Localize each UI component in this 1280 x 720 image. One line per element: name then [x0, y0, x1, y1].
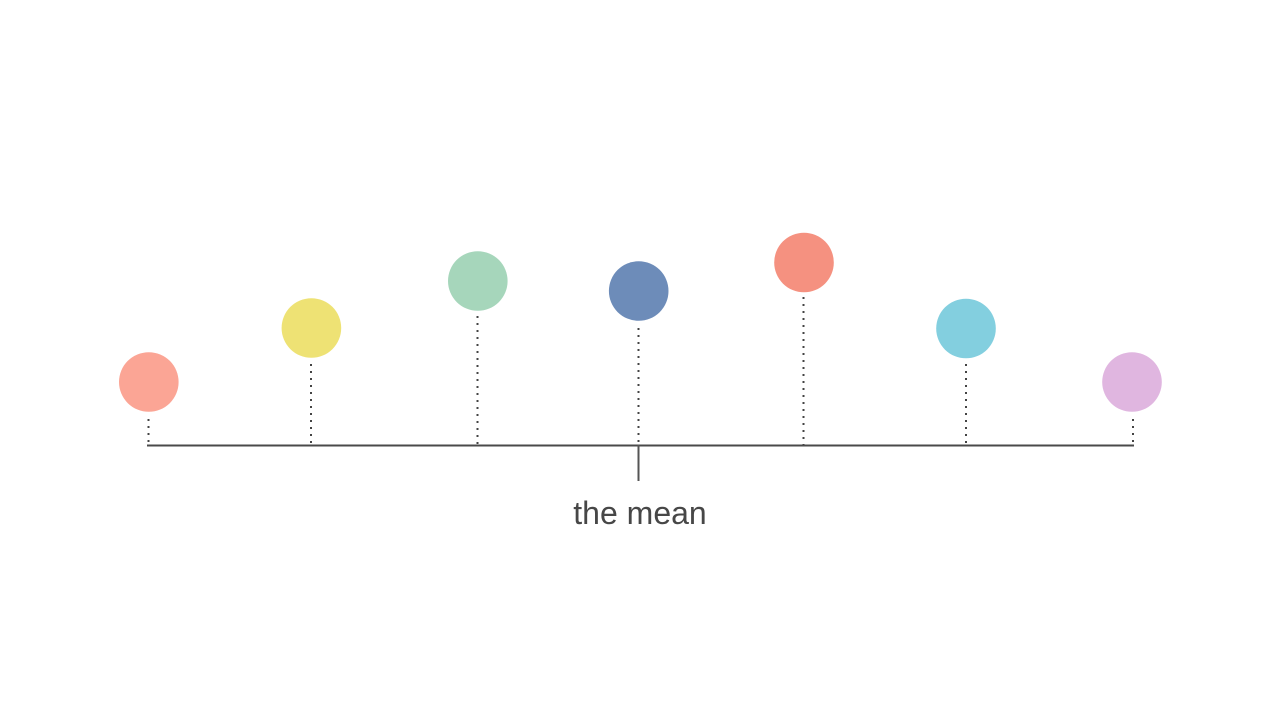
dotted stems — [148, 297, 1133, 445]
point: green circle — [448, 251, 508, 311]
point: light blue circle — [936, 299, 996, 358]
point: yellow circle — [282, 298, 341, 358]
point: blue circle — [609, 261, 668, 321]
number line axis — [147, 444, 1134, 446]
label: the mean: the mean — [573, 495, 707, 531]
point: lilac circle — [1102, 352, 1162, 412]
point: coral circle — [774, 233, 834, 292]
mean tick mark — [638, 445, 640, 481]
point: salmon circle — [119, 352, 179, 412]
